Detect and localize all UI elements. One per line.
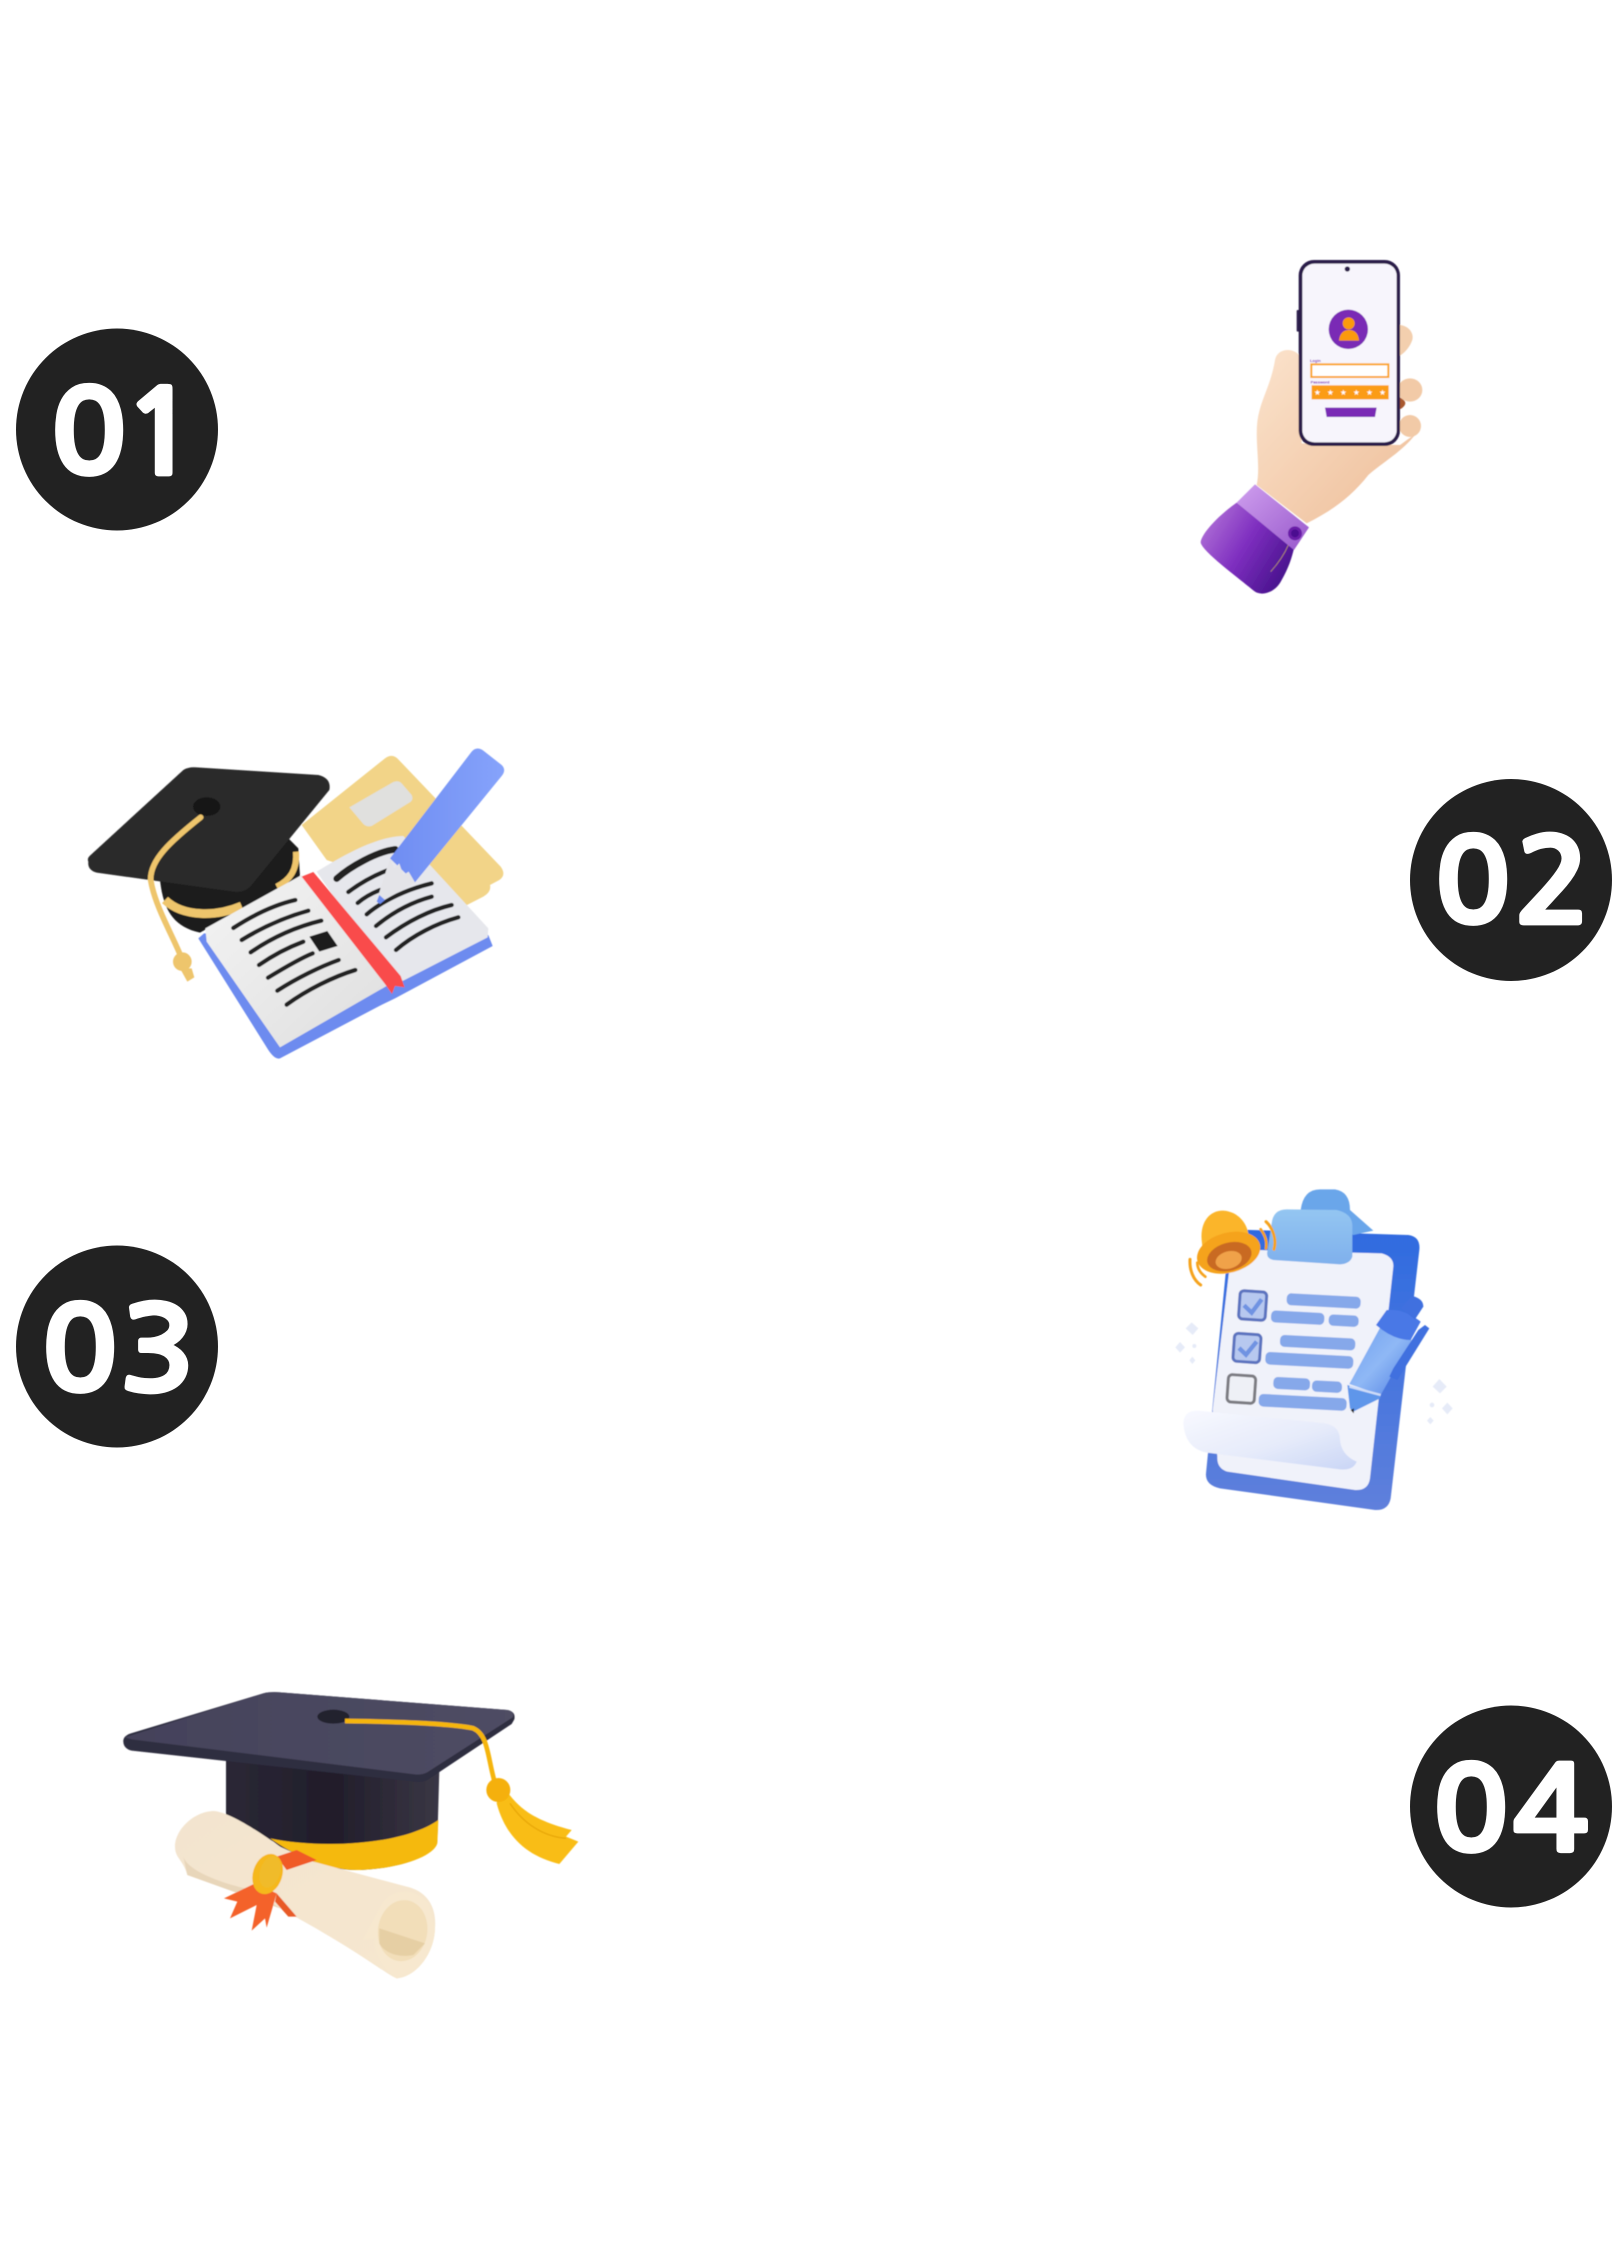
icon: sleeve and cuff: [1201, 484, 1309, 594]
text lines, left page: [233, 900, 355, 1005]
icon: clipboard board: [1206, 1229, 1419, 1510]
badge: 04: [1410, 1706, 1612, 1908]
badge: 02: [1410, 779, 1612, 981]
text lines, right page: [337, 849, 458, 950]
sparkles: [1175, 1322, 1453, 1424]
icon: tassel: [345, 1721, 578, 1864]
badge: 03: 03: [41, 1294, 197, 1409]
badge: 03: [16, 1246, 218, 1448]
illustration: mortarboard and diploma scroll: [123, 1692, 578, 1978]
icon: paper curl: [1183, 1411, 1357, 1470]
checklist rows: [1227, 1290, 1361, 1411]
icon: pen: [1347, 1296, 1429, 1413]
icon: phone: ★★★★★★: [1314, 388, 1386, 397]
icon: clip: [1267, 1189, 1373, 1264]
icon: blue pencil: [377, 749, 504, 904]
icon: ribbon and seal: [224, 1850, 317, 1931]
illustration: graduation cap, notebook, open book and pencil: [88, 749, 504, 1059]
badge: 01: [16, 328, 218, 530]
icon: graduation cap: [88, 767, 330, 982]
icon: hand: [1257, 325, 1422, 523]
icon: phone: Password: [1311, 379, 1330, 384]
icon: open book: [198, 836, 493, 1059]
icon: cap board: [123, 1692, 515, 1782]
badge: 02: 02: [1434, 826, 1592, 941]
icon: bell: [1190, 1211, 1275, 1285]
illustration: hand holding phone with login screen: [1201, 260, 1422, 594]
illustration: clipboard checklist with bell and pen: [1175, 1189, 1453, 1510]
badge: 01: 01: [50, 377, 200, 492]
icon: yellow notebook: [302, 756, 503, 906]
badge: 04: 04: [1432, 1754, 1590, 1869]
icon: phone: [1297, 260, 1400, 446]
icon: diploma scroll: [175, 1811, 435, 1978]
icon: cap base: [226, 1760, 439, 1870]
icon: phone: Login: [1310, 358, 1321, 363]
